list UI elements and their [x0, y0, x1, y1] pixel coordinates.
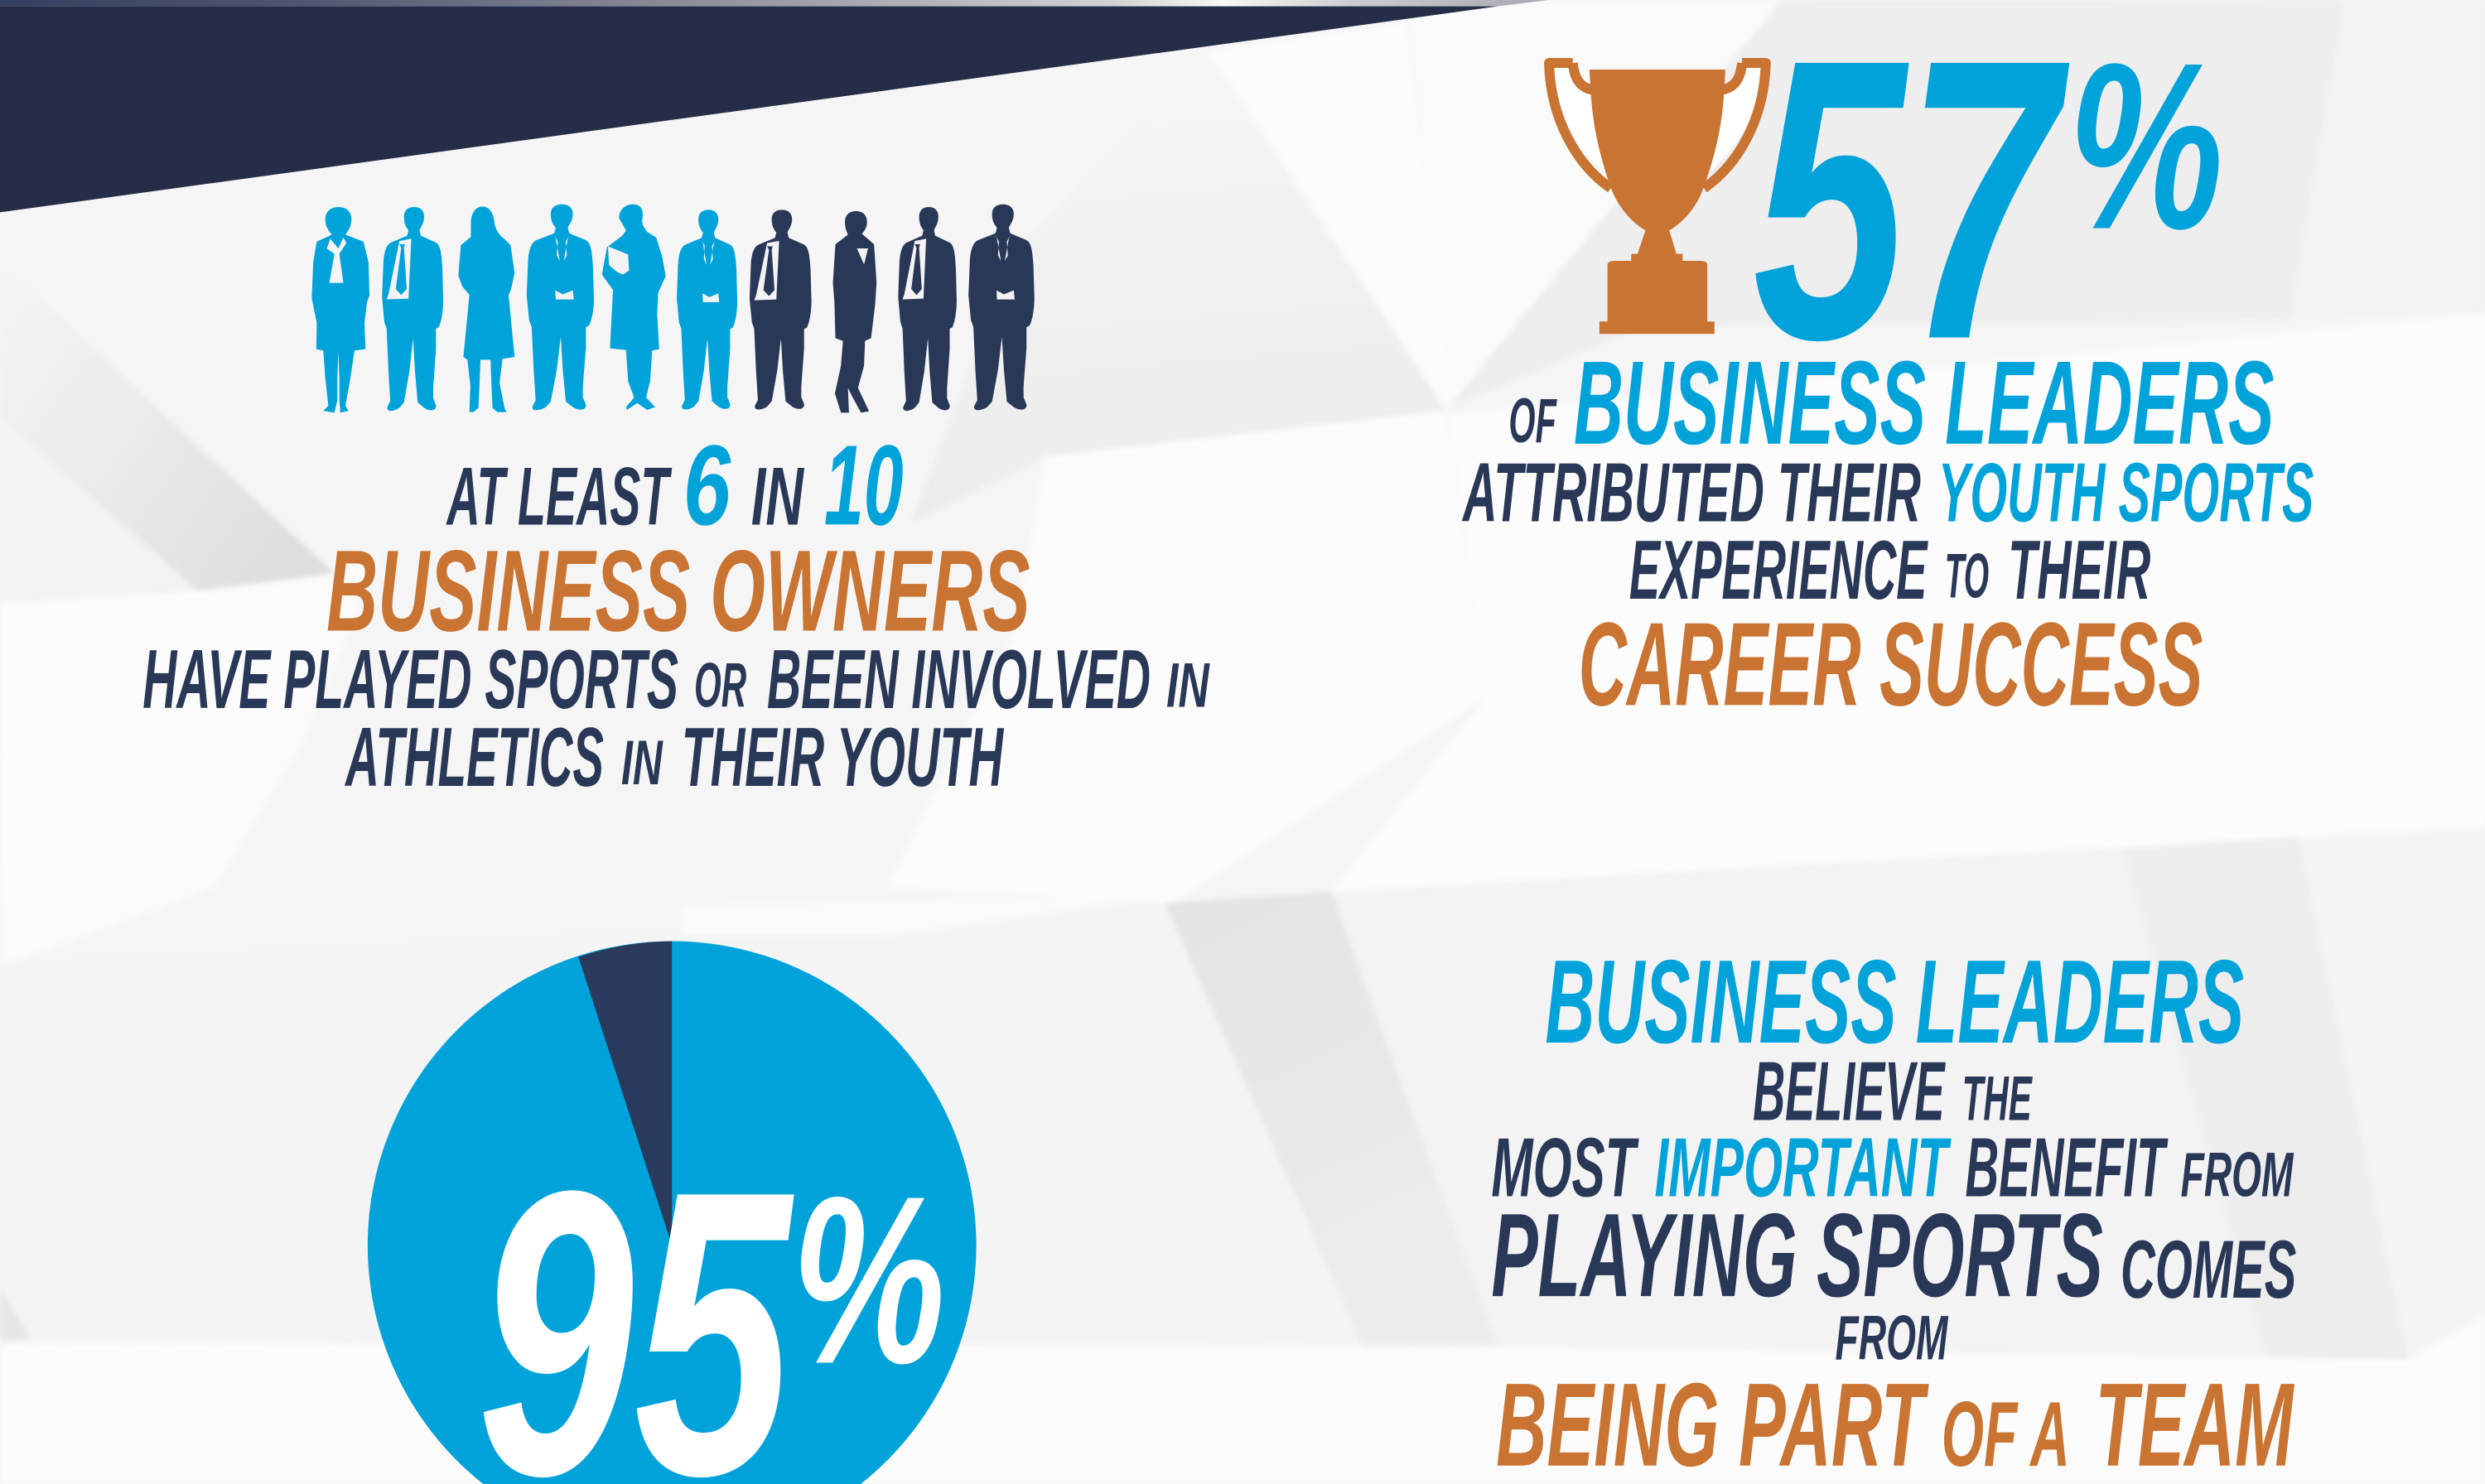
woman 3	[458, 206, 514, 412]
panel: 95 percent pie chart	[368, 942, 977, 1484]
woman 1	[311, 207, 369, 412]
woman 5 with folder	[602, 205, 666, 410]
text: have played sports or been involved in: HAVE PLAYED SPORTS	[142, 633, 678, 726]
man 7	[750, 210, 812, 409]
heading: business owners: BUSINESS OWNERS	[326, 526, 1030, 655]
man 4	[527, 205, 594, 410]
woman 8	[833, 211, 876, 412]
text: experience to their: THEIR	[2008, 523, 2150, 617]
text: most important benefit from: FROM	[2181, 1140, 2294, 1211]
text: have played sports or been involved in: OR	[694, 650, 746, 720]
heading line: at least 6 in 10: AT LEAST	[446, 450, 672, 542]
man 6	[677, 210, 737, 409]
percent sign: %	[792, 1146, 945, 1414]
text: most important benefit from	[1491, 1121, 2294, 1215]
icon: row of business people silhouettes	[311, 205, 1035, 412]
heading line: at least 6 in 10: IN	[751, 450, 804, 542]
text: have played sports or been involved in: IN	[1166, 650, 1210, 720]
text: playing sports comes: COMES	[2121, 1224, 2296, 1316]
heading line: at least 6 in 10: 6	[683, 422, 731, 549]
heading: of business leaders: OF	[1508, 386, 1557, 456]
text: athletics in their youth: IN	[621, 728, 663, 798]
text: most important benefit from: MOST	[1491, 1121, 1639, 1215]
text: have played sports or been involved in: BEEN INVOLVED	[767, 633, 1151, 726]
pie chart	[368, 942, 977, 1484]
man 9	[898, 207, 957, 411]
text: experience to their: EXPERIENCE	[1629, 523, 1928, 617]
panel: business leaders being part of a team	[1491, 936, 2296, 1484]
text: believe the: THE	[1962, 1064, 2033, 1135]
text: attributed their youth sports: ATTRIBUTED THEIR	[1461, 446, 1921, 539]
percent sign: %	[2068, 13, 2223, 279]
icon: trophy	[1549, 63, 1766, 334]
text: most important benefit from: IMPORTANT	[1654, 1121, 1952, 1215]
panel: 57 percent career success	[1461, 0, 2314, 730]
heading: being part of a team: OF A	[1942, 1383, 2070, 1484]
text: athletics in their youth: ATHLETICS	[344, 711, 604, 804]
top bar	[0, 0, 1548, 7]
text: from: FROM	[1836, 1303, 1949, 1374]
text: athletics in their youth: THEIR YOUTH	[682, 711, 1004, 804]
text: experience to their: TO	[1945, 541, 1989, 611]
panel: at least 6 in 10 business owners	[142, 205, 1210, 804]
text: believe the: BELIEVE	[1753, 1045, 1946, 1139]
navy diagonal header band	[0, 7, 1498, 212]
heading line: at least 6 in 10: 10	[824, 422, 904, 549]
man 2	[382, 207, 443, 411]
text: most important benefit from: BENEFIT	[1965, 1121, 2169, 1215]
heading line: at least 6 in 10	[446, 422, 904, 549]
man 10	[968, 205, 1035, 410]
